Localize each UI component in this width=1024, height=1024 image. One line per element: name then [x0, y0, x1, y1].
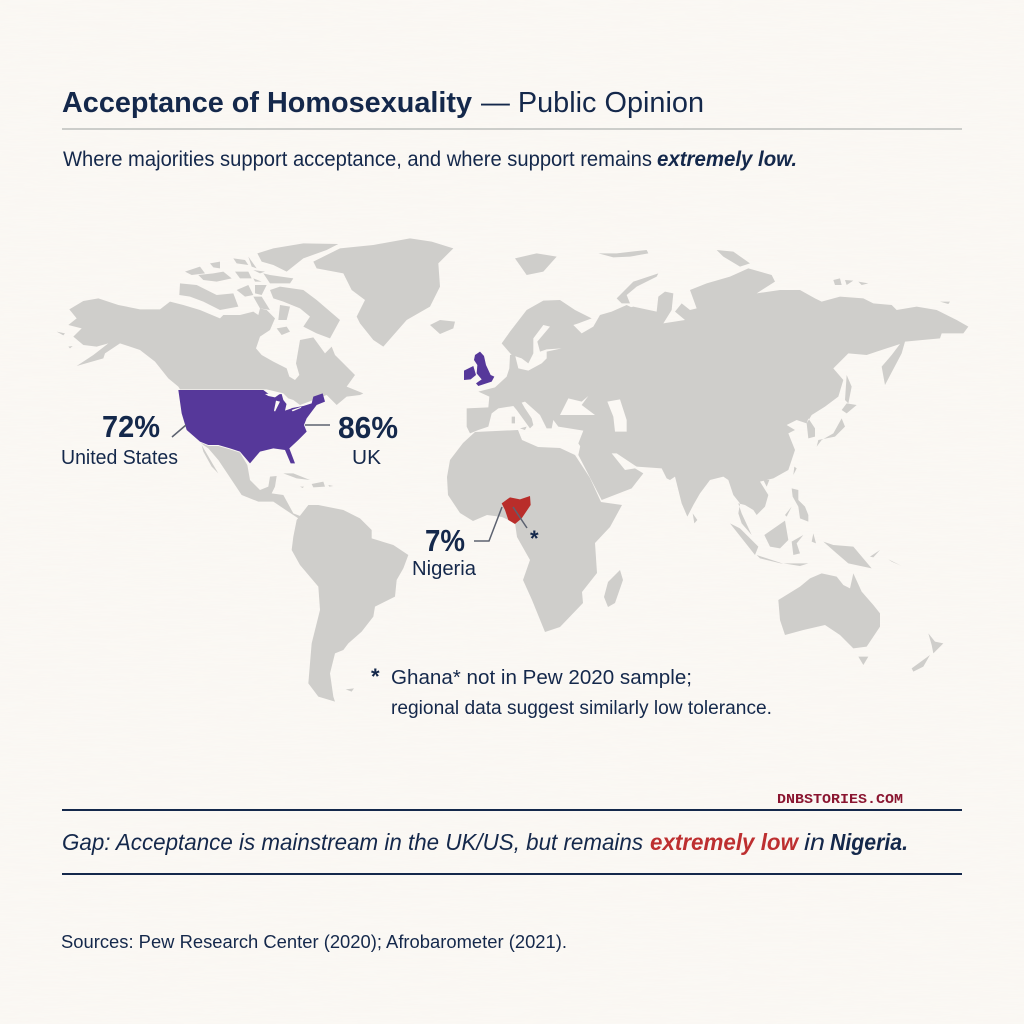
map: Mexico, Central America and Caribbean — [201, 443, 333, 522]
watermark: DNBSTORIES.COM — [777, 792, 903, 808]
map: Caspian Sea — [607, 399, 627, 432]
callout: Nigeria: Nigeria — [412, 558, 477, 580]
subtitle: Where majorities support acceptance, and where support remains — [63, 148, 652, 171]
sources: Sources: Pew Research Center (2020); Afrobarometer (2021). — [61, 932, 567, 952]
takeaway band: in — [804, 829, 825, 855]
map: Nigeria highlighted — [502, 496, 531, 524]
callout: Ghana asterisk — [513, 507, 539, 551]
footnote — [371, 664, 772, 719]
map: New Guinea, Australia and New Zealand — [778, 542, 943, 672]
title: — Public Opinion — [481, 87, 704, 119]
map: Africa and Madagascar — [447, 430, 623, 632]
map: Canadian Arctic islands — [179, 243, 340, 338]
callout: UK: UK — [352, 447, 382, 469]
callout: Nigeria: 7% — [425, 523, 465, 558]
map: Europe — [467, 300, 657, 448]
map: Japan, Philippines, Indonesia and Sri Lanka — [693, 403, 857, 566]
callout: Nigeria — [412, 507, 502, 580]
map: United States highlighted — [178, 390, 325, 463]
map: South America — [292, 505, 408, 702]
map: North America mainland and Greenland — [57, 238, 455, 405]
callout: Ghana asterisk: * — [530, 526, 539, 551]
world map — [57, 238, 968, 702]
callout: United States: 72% — [102, 409, 160, 444]
map: United Kingdom and Ireland highlighted — [464, 352, 494, 386]
title: Acceptance of Homosexuality — [62, 87, 472, 119]
callout: United States: United States — [61, 447, 178, 469]
callout: UK: 86% — [338, 410, 398, 445]
map: Asia — [512, 250, 968, 535]
takeaway band: Nigeria. — [830, 829, 908, 855]
subtitle: extremely low. — [657, 148, 797, 171]
footnote: Ghana* not in Pew 2020 sample; — [391, 667, 692, 689]
takeaway band — [62, 810, 962, 874]
callout: UK — [305, 410, 398, 469]
takeaway band: extremely low — [650, 829, 800, 855]
map: Arctic and Pacific islands — [512, 250, 950, 430]
takeaway band: Gap: Acceptance is mainstream in the UK/US, but remains — [62, 829, 643, 855]
footnote: regional data suggest similarly low tolerance. — [391, 698, 772, 719]
callout: United States — [61, 409, 186, 469]
map: Black Sea — [560, 396, 595, 415]
footnote: * — [371, 664, 380, 689]
map: Great Lakes — [265, 393, 302, 412]
